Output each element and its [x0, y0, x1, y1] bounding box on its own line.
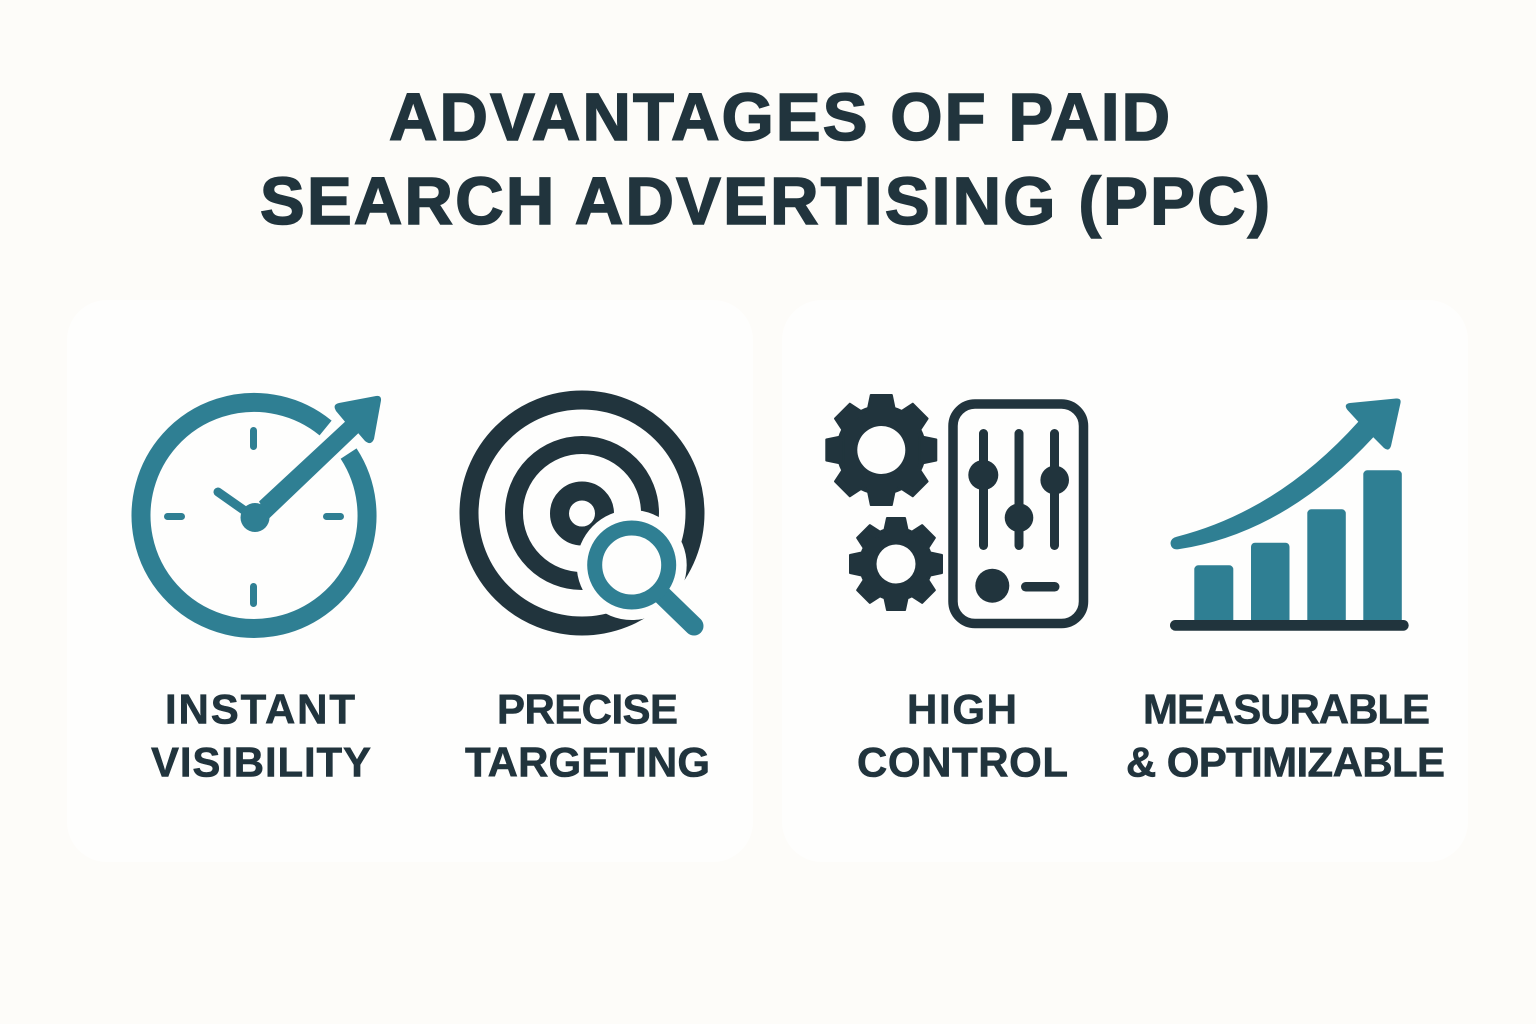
icon: target with magnifier	[469, 400, 720, 660]
label: measurable and optimizable: & OPTIMIZABLE	[1126, 738, 1445, 786]
label: precise targeting: PRECISE	[497, 686, 678, 732]
label: instant visibility: VISIBILITY	[151, 738, 371, 786]
icon: gears	[826, 395, 942, 610]
label: precise targeting	[465, 686, 710, 786]
label: instant visibility	[151, 686, 371, 786]
label: measurable and optimizable: MEASURABLE	[1143, 686, 1430, 732]
label: high control: CONTROL	[857, 738, 1068, 786]
icon: control panel with sliders	[953, 404, 1084, 624]
panel: left card	[67, 300, 753, 862]
icon: growth bar chart with arrow	[1170, 398, 1409, 631]
title	[260, 80, 1270, 239]
label: precise targeting: TARGETING	[465, 738, 710, 786]
title: SEARCH ADVERTISING (PPC)	[260, 164, 1270, 239]
small gear	[850, 518, 942, 610]
title: ADVANTAGES OF PAID	[389, 80, 1170, 155]
large gear	[826, 395, 936, 505]
panel: right card	[782, 300, 1468, 862]
label: measurable and optimizable	[1126, 686, 1445, 786]
label: high control	[857, 686, 1068, 786]
icon: clock with arrow	[141, 396, 381, 628]
label: high control: HIGH	[907, 686, 1017, 732]
label: instant visibility: INSTANT	[165, 686, 355, 732]
